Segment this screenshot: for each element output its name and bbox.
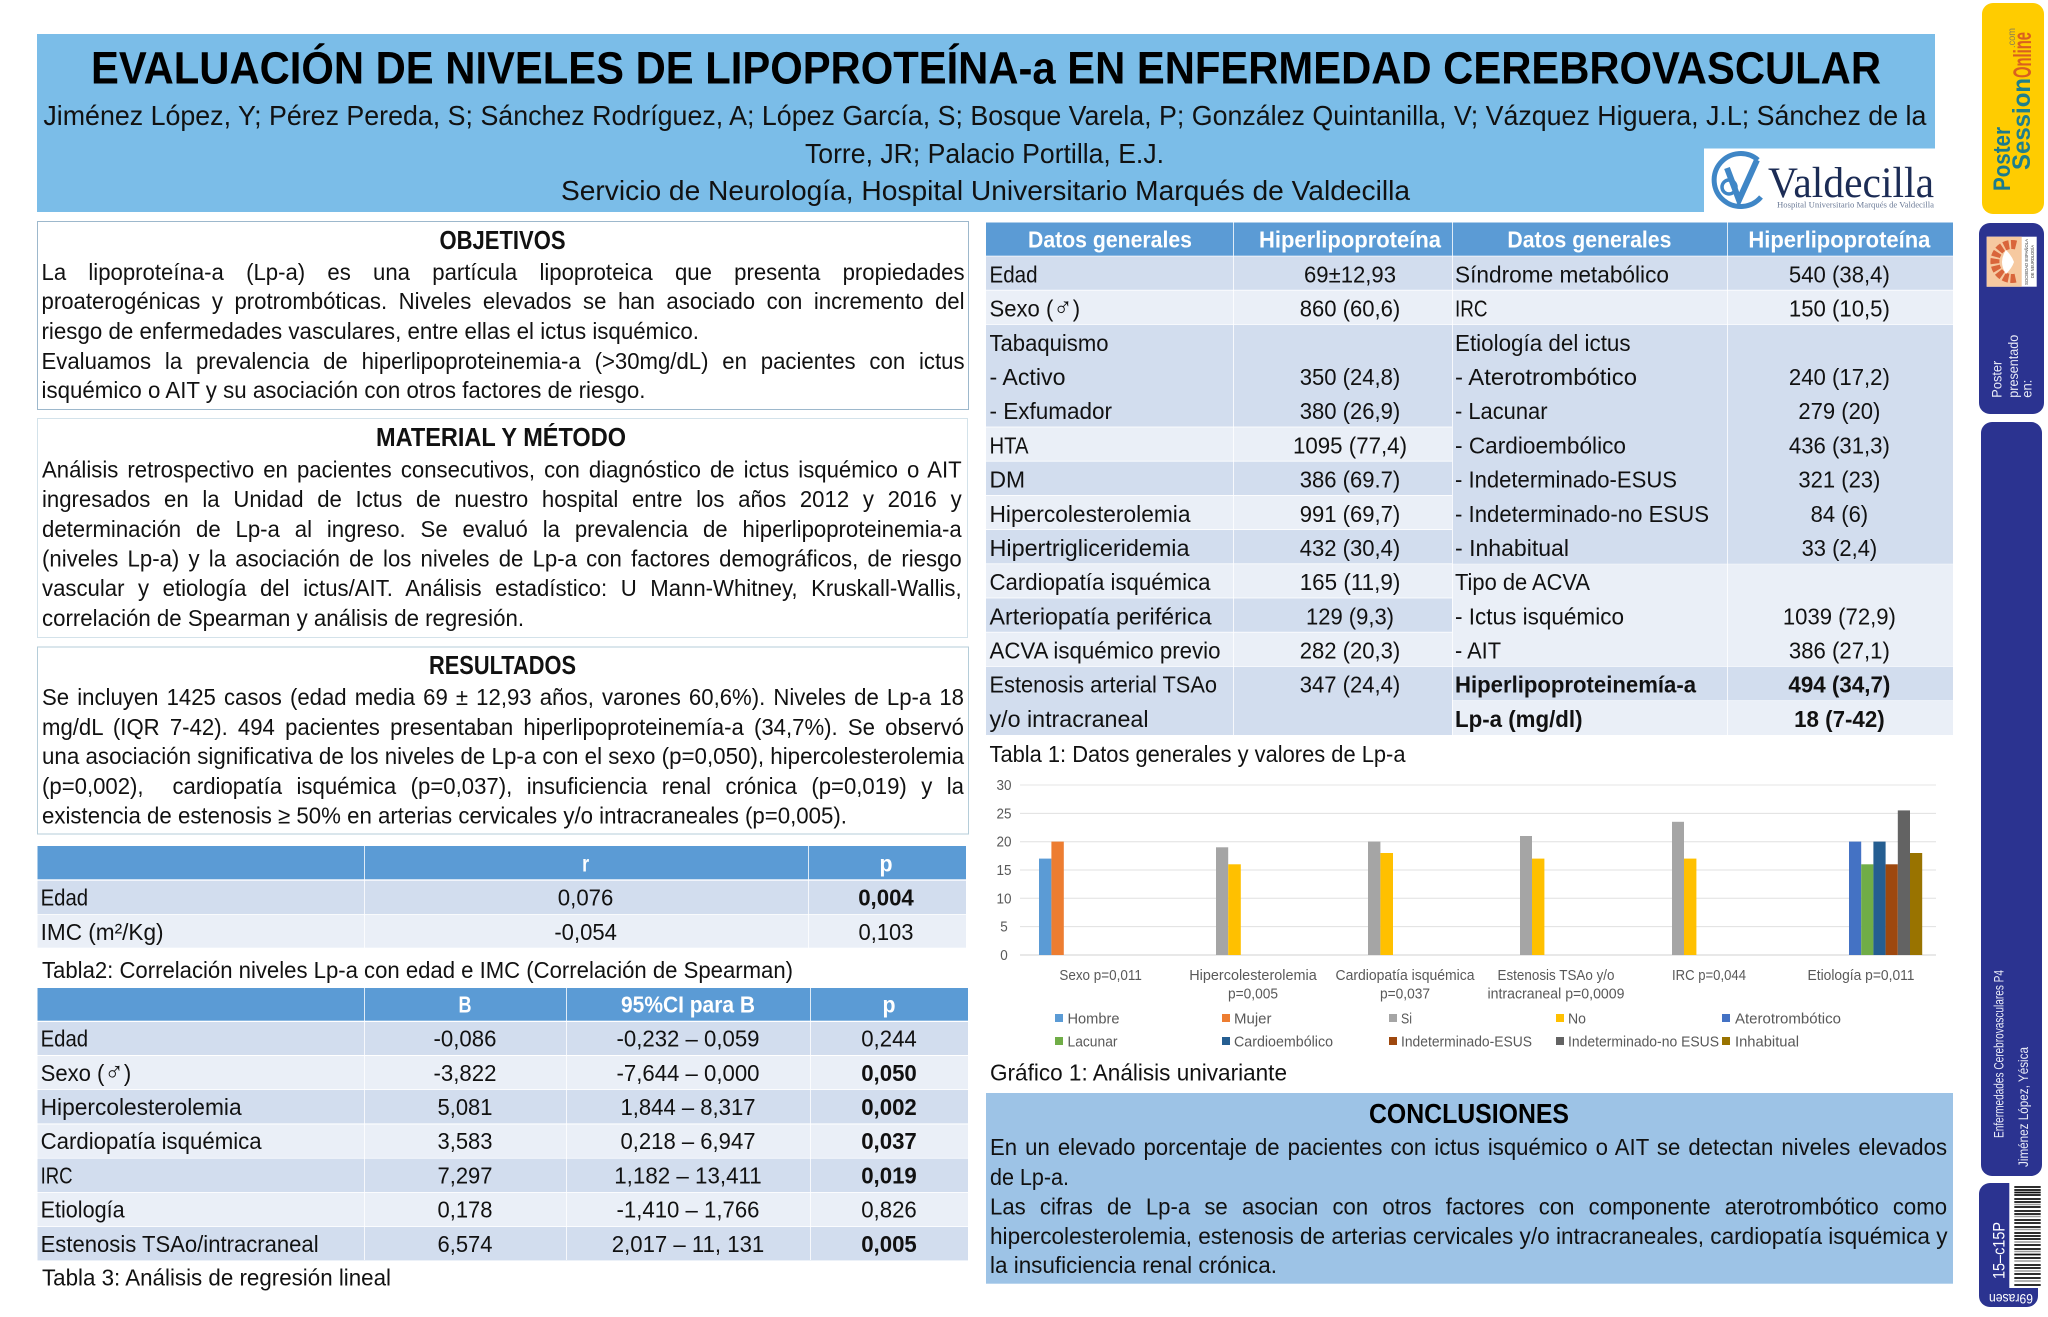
logo: Valdecilla: Valdecilla (1768, 160, 1934, 207)
table 1: datos generales: 494 (34,7) (1788, 672, 1890, 698)
table 3: regresión lineal: Etiología (41, 1197, 125, 1223)
category labels: p=0,037 (1380, 987, 1430, 1003)
legend: Indeterminado-ESUS (1401, 1035, 1532, 1051)
heading: objetivos: OBJETIVOS (440, 227, 566, 255)
table 1: datos generales: 282 (20,3) (1300, 638, 1400, 664)
table 1: datos generales: Datos generales (1028, 226, 1192, 252)
table 3: regresión lineal: 0,218 – 6,947 (620, 1128, 756, 1154)
table 1: datos generales: 165 (11,9) (1300, 569, 1400, 595)
poster code: 15–c15P (1989, 1222, 2008, 1279)
barcode (2014, 1187, 2041, 1285)
text block: conclusiones: hipercolesterolemia, estenosis de arterias cervicales y/o intracraneales, cardiopatía isquémica y (990, 1223, 1948, 1249)
sidebar: session tab (1981, 422, 2042, 1176)
wordmark: Session (2008, 78, 2036, 170)
wordmark: .com (2007, 28, 2018, 48)
text block: resultados: mg/dL (IQR 7-42). 494 pacientes presentaban hiperlipoproteinemía-a (34,7%). Se observó (42, 714, 964, 740)
text block: conclusiones (990, 1130, 1948, 1278)
icon: society logo (1987, 237, 2037, 287)
table 1: datos generales: 18 (7-42) (1794, 706, 1885, 732)
table 1: datos generales: 33 (2,4) (1802, 535, 1877, 561)
table 3: regresión lineal: B (458, 992, 472, 1018)
table 1: datos generales: 432 (30,4) (1300, 535, 1400, 561)
wordmark (1989, 28, 2037, 191)
category labels: Estenosis TSAo y/o (1498, 968, 1614, 984)
table 1: datos generales: 1039 (72,9) (1783, 603, 1896, 629)
table 1: datos generales: 321 (23) (1798, 467, 1880, 493)
table 2: correlación: 0,103 (858, 919, 914, 945)
text: poster presentado en: en: (2020, 380, 2035, 398)
table 3: regresión lineal: Estenosis TSAo/intracraneal (41, 1231, 319, 1257)
text block: conclusiones: Las cifras de Lp-a se asocian con otros factores con componente aterotrombótico como (990, 1194, 1947, 1220)
y axis and grid: 25 (996, 806, 1012, 822)
table 3: regresión lineal: 1,844 – 8,317 (620, 1094, 756, 1120)
table 1: datos generales: 279 (20) (1798, 398, 1880, 424)
table 2: correlación: Edad (41, 885, 88, 911)
text block: resultados: una asociación significativa de los niveles de Lp-a con el sexo (p=0,050), hipercolesterolemia (42, 743, 964, 769)
logo: Valdecilla (1704, 148, 1940, 212)
table 1: datos generales: IRC (1455, 296, 1488, 322)
table 1: datos generales: - Lacunar (1455, 398, 1548, 424)
text block: objetivos: isquémico o AIT y su asociación con otros factores de riesgo. (42, 377, 646, 403)
sidebar: poster session online tab (1982, 3, 2044, 214)
y axis and grid: 10 (996, 891, 1012, 907)
table 3: regresión lineal: -0,086 (434, 1026, 496, 1052)
panel: material y método (38, 418, 968, 638)
table 3: regresión lineal: Hipercolesterolemia (41, 1094, 242, 1120)
table 3: regresión lineal: 0,244 (861, 1026, 917, 1052)
table 1: datos generales: Tipo de ACVA (1455, 569, 1591, 595)
table 3: regresión lineal: -0,232 – 0,059 (616, 1026, 760, 1052)
table 1: datos generales: 84 (6) (1811, 501, 1868, 527)
table 2: correlación (38, 846, 966, 948)
y axis and grid: 5 (1000, 920, 1008, 936)
legend: Aterotrombótico (1735, 1011, 1841, 1027)
text: poster presentado en: presentado (2006, 335, 2021, 398)
table 3: regresión lineal: Sexo (♂) (41, 1057, 131, 1087)
table 3: regresión lineal: IRC (41, 1162, 73, 1188)
table 3: regresión lineal: 95%CI para B (621, 992, 755, 1018)
table 1: datos generales: 150 (10,5) (1789, 296, 1890, 322)
table 1: datos generales: 240 (17,2) (1789, 364, 1890, 390)
legend: Lacunar (1068, 1035, 1118, 1051)
text: poster presentado en: Poster (1990, 360, 2005, 398)
legend: Mujer (1234, 1011, 1272, 1027)
category labels: Etiología p=0,011 (1808, 968, 1914, 984)
text block: material y método: ingresados en la Unidad de Ictus de nuestro hospital entre los años 2012 y 2016 y (42, 486, 962, 512)
text block: conclusiones: de Lp-a. (990, 1164, 1069, 1190)
table 1: datos generales (986, 222, 1953, 735)
table 1: datos generales: - Exfumador (990, 398, 1112, 424)
table 3: regresión lineal: 0,005 (861, 1231, 917, 1257)
table 2: correlación: -0,054 (554, 919, 617, 945)
table 1: datos generales: Hiperlipoproteinemía-a (1455, 672, 1696, 698)
table 3: regresión lineal (38, 988, 968, 1260)
sidebar: barcode tab (1979, 1183, 2043, 1307)
y axis and grid: 0 (1000, 948, 1008, 964)
table 1: datos generales: Edad (990, 262, 1038, 288)
text block: conclusiones: la insuficiencia renal crónica. (990, 1252, 1277, 1278)
table 3: regresión lineal: Cardiopatía isquémica (41, 1128, 262, 1154)
text block: material y método: (niveles Lp-a) y la asociación de los niveles de Lp-a con factores demográficos, de riesgo (42, 546, 962, 572)
wordmark: Poster (1989, 127, 2016, 191)
text block: objetivos: riesgo de enfermedades vasculares, entre ellas el ictus isquémico. (42, 318, 699, 344)
table 3: regresión lineal: 7,297 (438, 1162, 492, 1188)
text block: resultados: (p=0,002), cardiopatía isquémica (p=0,037), insuficiencia renal crónica (p=0,019) y la (42, 773, 964, 799)
table 1: datos generales: Cardiopatía isquémica (990, 569, 1211, 595)
table 1: datos generales: Etiología del ictus (1455, 330, 1631, 356)
table 3: regresión lineal: 5,081 (438, 1094, 492, 1120)
table 3: regresión lineal: 0,826 (861, 1197, 917, 1223)
legend: Indeterminado-no ESUS (1568, 1035, 1719, 1051)
table 3: regresión lineal: -7,644 – 0,000 (616, 1060, 760, 1086)
icon: society logo: DE NEUROLOGÍA (2029, 245, 2035, 278)
table 3: regresión lineal: 0,178 (438, 1197, 492, 1223)
category labels: p=0,005 (1228, 987, 1278, 1003)
text block: objetivos (42, 255, 965, 403)
table 2: correlación: 0,004 (858, 885, 914, 911)
table 3: regresión lineal: 1,182 – 13,411 (614, 1162, 762, 1188)
table 1: datos generales: 991 (69,7) (1300, 501, 1400, 527)
heading: material y método: MATERIAL Y MÉTODO (376, 423, 626, 452)
heading: resultados: RESULTADOS (429, 652, 576, 680)
table 1: datos generales: 350 (24,8) (1300, 364, 1400, 390)
table 2: correlación: IMC (m²/Kg) (41, 919, 164, 945)
category labels: IRC p=0,044 (1672, 968, 1746, 984)
legend: Cardioembólico (1234, 1035, 1333, 1051)
authors (43, 100, 1927, 169)
table 1: datos generales: HTA (990, 432, 1029, 458)
legend (1055, 1011, 1841, 1051)
legend: Hombre (1068, 1011, 1120, 1027)
text block: resultados: existencia de estenosis ≥ 50% en arterias cervicales y/o intracraneales (p=0,005). (42, 803, 847, 829)
table 1: datos generales: Hipertrigliceridemia (990, 535, 1190, 561)
table 1: datos generales: 386 (27,1) (1789, 638, 1890, 664)
heading: conclusiones: CONCLUSIONES (1369, 1098, 1569, 1129)
table 1: datos generales: Estenosis arterial TSAo (990, 672, 1217, 698)
text block: objetivos: La lipoproteína-a (Lp-a) es una partícula lipoproteica que presenta propiedades (42, 259, 965, 285)
table 1: datos generales: - Ictus isquémico (1455, 603, 1624, 629)
y axis and grid: 15 (996, 863, 1012, 879)
text block: resultados: Se incluyen 1425 casos (edad media 69 ± 12,93 años, varones 60,6%). Niveles de Lp-a 18 (42, 684, 964, 710)
table 2: correlación: p (880, 851, 892, 877)
header band (37, 34, 1935, 212)
table 3: regresión lineal: -1,410 – 1,766 (616, 1197, 760, 1223)
table 1: datos generales: 386 (69.7) (1300, 467, 1400, 493)
y axis and grid (996, 778, 1936, 964)
category labels: Sexo p=0,011 (1059, 968, 1142, 984)
bar chart: análisis univariante (996, 778, 1936, 1051)
table 3: regresión lineal: Edad (41, 1026, 88, 1052)
legend: Inhabitual (1735, 1035, 1799, 1051)
table 1: datos generales: Hiperlipoproteína (1259, 226, 1441, 252)
panel: objetivos (38, 222, 968, 410)
table 1: datos generales: Datos generales (1507, 226, 1671, 252)
table 1: datos generales: 1095 (77,4) (1293, 432, 1407, 458)
table 1: datos generales: Arteriopatía periférica (990, 603, 1212, 629)
table 1: datos generales: Lp-a (mg/dl) (1455, 706, 1582, 732)
text block: conclusiones: En un elevado porcentaje de pacientes con ictus isquémico o AIT se detectan niveles elevados (990, 1134, 1947, 1160)
table 3: regresión lineal: 2,017 – 11, 131 (612, 1231, 764, 1257)
table 1: datos generales: - Activo (990, 364, 1066, 390)
sidebar: presented-at tab (1979, 223, 2044, 414)
text block: objetivos: proaterogénicas y protrombóticas. Niveles elevados se han asociado con incremento del (42, 288, 965, 314)
table 1: datos generales: - Inhabitual (1455, 535, 1569, 561)
legend: Si (1401, 1011, 1412, 1027)
text block: objetivos: Evaluamos la prevalencia de hiperlipoproteinemia-a (>30mg/dL) en pacientes con ictus (42, 348, 965, 374)
category labels: intracraneal p=0,0009 (1488, 987, 1624, 1003)
logo: Valdecilla: Hospital Universitario Marqués de Valdecilla (1777, 200, 1934, 210)
title: EVALUACIÓN DE NIVELES DE LIPOPROTEÍNA-a EN ENFERMEDAD CEREBROVASCULAR (91, 42, 1881, 93)
table 3: regresión lineal: 3,583 (438, 1128, 492, 1154)
table 1: datos generales: 860 (60,6) (1300, 296, 1400, 322)
table 1: datos generales: 129 (9,3) (1306, 603, 1394, 629)
caption: tabla 1: Tabla 1: Datos generales y valores de Lp-a (990, 741, 1406, 767)
panel: resultados (38, 647, 968, 834)
table 1: datos generales: 436 (31,3) (1789, 432, 1890, 458)
text block: material y método: correlación de Spearman y análisis de regresión. (42, 605, 524, 631)
affiliation: Servicio de Neurología, Hospital Universitario Marqués de Valdecilla (561, 175, 1410, 206)
text block: material y método: Análisis retrospectivo en pacientes consecutivos, con diagnóstico de ictus isquémico o AIT (42, 457, 962, 483)
table 1: datos generales: Síndrome metabólico (1455, 262, 1669, 288)
wordmark: Online (2009, 32, 2037, 78)
table 1: datos generales: 347 (24,4) (1300, 672, 1400, 698)
bars (1039, 810, 1922, 955)
table 3: regresión lineal: p (882, 992, 896, 1018)
table 1: datos generales: Hipercolesterolemia (990, 501, 1191, 527)
table 1: datos generales: Tabaquismo (990, 330, 1108, 356)
y axis and grid: 30 (996, 778, 1012, 794)
caption: gráfico 1: Gráfico 1: Análisis univariante (990, 1060, 1287, 1086)
table 3: regresión lineal: 0,037 (861, 1128, 917, 1154)
upside-down site code: 69rasen (1989, 1291, 2033, 1306)
caption: tabla 2: Tabla2: Correlación niveles Lp-a con edad e IMC (Correlación de Spearman) (42, 957, 793, 983)
table 1: datos generales: y/o intracraneal (990, 706, 1148, 732)
table 1: datos generales: - Aterotrombótico (1455, 364, 1637, 390)
text block: material y método (42, 453, 962, 631)
caption: tabla 3: Tabla 3: Análisis de regresión lineal (42, 1265, 391, 1291)
y axis and grid: 20 (996, 835, 1012, 851)
text: poster presentado en (1990, 335, 2035, 398)
icon: society logo: SOCIEDAD ESPAÑOLA (2023, 239, 2029, 285)
table 3: regresión lineal: 6,574 (438, 1231, 493, 1257)
table 3: regresión lineal: 0,050 (861, 1060, 917, 1086)
table 1: datos generales: - Indeterminado-ESUS (1455, 467, 1677, 493)
table 1: datos generales: 540 (38,4) (1789, 262, 1890, 288)
table 1: datos generales: - AIT (1455, 638, 1501, 664)
category labels (1059, 968, 1914, 1003)
table 3: regresión lineal: 0,002 (861, 1094, 917, 1120)
text block: material y método: vascular y etiología del ictus/AIT. Análisis estadístico: U Mann-Whitney, Kruskall-Wallis, (42, 575, 962, 601)
category labels: Hipercolesterolemia (1189, 968, 1318, 984)
table 1: datos generales: 69±12,93 (1304, 262, 1396, 288)
table 3: regresión lineal: 0,019 (861, 1162, 917, 1188)
table 1: datos generales: Sexo (♂) (990, 293, 1080, 323)
text: session: Enfermedades Cerebrovasculares P4 (1990, 970, 2006, 1138)
table 2: correlación: 0,076 (558, 885, 613, 911)
table 1: datos generales: 380 (26,9) (1300, 398, 1400, 424)
table 1: datos generales: - Indeterminado-no ESUS (1455, 501, 1709, 527)
text block: material y método: determinación de Lp-a al ingreso. Se evaluó la prevalencia de hiperlipoproteinemia-a (42, 516, 962, 542)
table 1: datos generales: Hiperlipoproteína (1748, 226, 1931, 252)
panel: conclusiones (986, 1093, 1953, 1284)
table 3: regresión lineal: -3,822 (434, 1060, 496, 1086)
authors: Torre, JR; Palacio Portilla, E.J. (805, 138, 1164, 169)
table 1: datos generales: - Cardioembólico (1455, 432, 1626, 458)
table 2: correlación: r (582, 851, 589, 877)
legend: No (1568, 1011, 1586, 1027)
text block: resultados (42, 680, 964, 829)
authors: Jiménez López, Y; Pérez Pereda, S; Sánchez Rodríguez, A; López García, S; Bosque Varela, P; González Quintanilla, V; Vázquez Higuera, J.L; Sánchez de la (43, 100, 1927, 131)
category labels: Cardiopatía isquémica (1336, 968, 1475, 984)
table 1: datos generales: ACVA isquémico previo (990, 638, 1220, 664)
text: author: Jiménez López, Yésica (2015, 1047, 2031, 1167)
table 1: datos generales: DM (990, 467, 1025, 493)
